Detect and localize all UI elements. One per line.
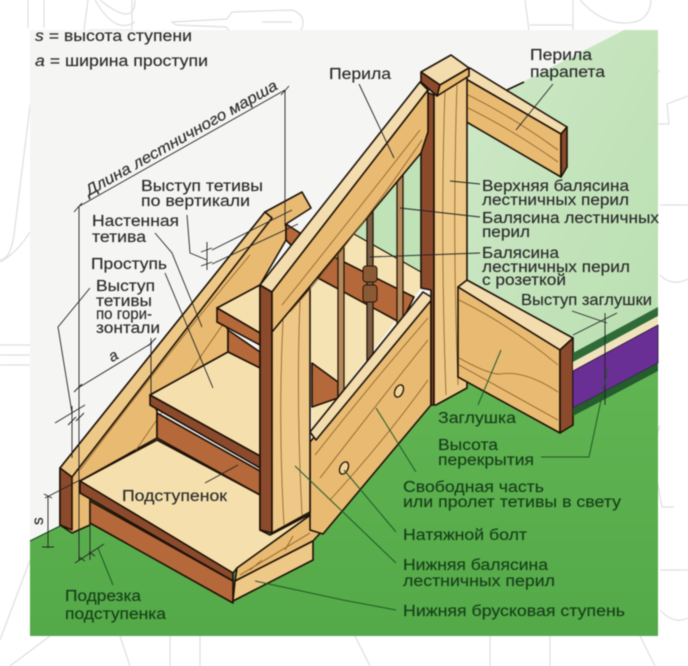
leader: parapet (516, 84, 553, 130)
bolt hole lower (338, 460, 350, 476)
dimension lines (42, 86, 617, 563)
label: railing: Перила (329, 66, 391, 83)
leader: riser (205, 465, 238, 483)
rise dimension (42, 480, 80, 548)
label: riser cut (65, 588, 166, 623)
left labels (30, 178, 263, 525)
plate face (458, 287, 560, 433)
block top (235, 511, 325, 581)
label: upper baluster: Верхняя балясина (482, 178, 629, 195)
leader: baluster (400, 208, 480, 217)
wall stringer (60, 192, 311, 533)
upper riser seen behind balusters (318, 256, 414, 323)
second nosing (150, 395, 260, 468)
label: stop overhang: Выступ заглушки (521, 292, 652, 309)
horizontal overhang dimension (55, 405, 85, 458)
upper green strip (573, 307, 658, 362)
upper post cap top (421, 55, 469, 85)
label: vertical overhang: Выступ тетивы (141, 178, 263, 195)
legend rise: s = высота ступени (35, 28, 192, 45)
purple joist (573, 325, 658, 408)
stringer end (60, 468, 72, 530)
label: free span: Свободная часть (403, 479, 544, 496)
upper post face (434, 76, 467, 405)
leader: wall stringer (155, 233, 202, 327)
lower right labels: или пролет тетивы в свету (403, 494, 621, 511)
tread width dimension (74, 338, 156, 395)
cream strip (573, 316, 658, 371)
left labels: тетива (92, 229, 146, 246)
third riser (228, 330, 260, 368)
wall line behind parapet (507, 82, 524, 90)
right labels: лестничных перил (482, 192, 629, 209)
second step (150, 352, 260, 495)
label: parapet railing (530, 47, 605, 81)
lower open stringer (310, 292, 433, 534)
label: baluster: Балясина лестничных (482, 210, 659, 227)
panel: pale green wall (467, 30, 658, 372)
block front (233, 541, 313, 601)
label: riser cut: Подрезка (65, 588, 141, 605)
panel: green floor (30, 360, 658, 636)
baluster right (397, 172, 403, 323)
bolt hole upper (393, 383, 405, 399)
parapet handrail (458, 68, 567, 177)
leader: bottom block (255, 581, 396, 610)
leader lines (58, 84, 608, 610)
label: a: a (106, 347, 122, 366)
open stringer top edge (310, 292, 433, 440)
label: parapet railing: парапета (530, 64, 605, 81)
plate end (560, 338, 573, 433)
post face (272, 288, 310, 533)
label: horizontal overhang: Выступ (96, 278, 155, 295)
lower right labels (403, 410, 625, 620)
upper post side (421, 90, 434, 405)
right labels (482, 178, 659, 309)
handrail face (272, 90, 428, 332)
floor beam (573, 307, 658, 416)
handrail top edge (260, 82, 428, 292)
first nosing (80, 481, 233, 581)
label: tread: Проступь (91, 256, 167, 273)
label: parapet railing: Перила (530, 47, 592, 64)
label: stop plate: Заглушка (438, 410, 516, 427)
lower newel post (260, 285, 310, 533)
cut dimension (75, 500, 104, 563)
upper newel post (421, 55, 469, 405)
left labels: по гори- (96, 306, 152, 323)
leader: vertical overhang (187, 215, 207, 260)
right labels: перил (482, 224, 530, 241)
left labels: зонтали (96, 320, 160, 337)
baluster left (338, 245, 344, 400)
label: floor height: Высота (438, 437, 498, 454)
baluster with rosette (363, 210, 377, 362)
parapet top edge (459, 68, 567, 134)
label: s: s (30, 517, 47, 525)
main handrail (260, 82, 428, 332)
label: rosette baluster: Балясина (482, 245, 559, 262)
stringer face (60, 192, 311, 533)
legend tread: a = ширина проступи (35, 53, 208, 70)
parapet end grain (561, 127, 567, 177)
stair opening behind the balusters (310, 155, 421, 430)
second riser (157, 413, 260, 495)
leader: lower baluster (295, 466, 396, 563)
window: pale green through balusters (354, 155, 421, 272)
label: bottom block step: Нижняя брусковая ступень (403, 603, 625, 620)
leader: free span (376, 408, 416, 472)
first tread (80, 440, 316, 573)
lower right labels: лестничных перил (403, 573, 555, 590)
parapet face (458, 75, 561, 177)
label: wall stringer: Настенная (92, 213, 179, 230)
vertical projection dimension (201, 210, 298, 270)
leader: upper baluster (450, 181, 480, 184)
stop plate (458, 280, 573, 433)
first riser (90, 501, 233, 603)
lower riser seen behind balusters (312, 363, 338, 407)
dimension label: flight length: Длина лестничного марша (81, 77, 281, 201)
label: tension bolt: Натяжной болт (403, 527, 527, 544)
balusters (338, 172, 403, 400)
label: riser cut: подступенка (65, 606, 166, 623)
open stringer face (310, 300, 431, 534)
plate top edge (458, 280, 573, 350)
post side (260, 285, 272, 533)
first step (80, 440, 316, 603)
leader: stop plate (478, 350, 501, 405)
lower right labels: перекрытия (438, 452, 534, 469)
stop overhang dimension (572, 311, 617, 405)
leader: rosette baluster (370, 253, 480, 257)
label: riser: Подступенок (122, 488, 227, 505)
right labels: с розеткой (482, 272, 566, 289)
stringer top strip (60, 212, 272, 477)
leader: riser cut (98, 548, 113, 585)
left labels: тетивы (96, 293, 152, 310)
third step (217, 285, 260, 368)
legend (35, 28, 208, 70)
upper post cap front (421, 72, 440, 96)
bottom block step (233, 511, 325, 601)
lower green strip (573, 363, 658, 416)
label: lower baluster: Нижняя балясина (403, 557, 548, 574)
leader: railing (359, 84, 394, 158)
third nosing (217, 308, 260, 345)
right labels: лестничных перил (482, 259, 630, 276)
leader: horizontal overhang (58, 288, 90, 413)
left labels: по вертикали (141, 193, 250, 210)
ground edge line (30, 525, 62, 541)
leader: floor height (541, 368, 608, 457)
leader: tension bolt (344, 470, 396, 532)
leader: tread (165, 273, 213, 388)
top step behind the wall stringer (286, 224, 300, 250)
